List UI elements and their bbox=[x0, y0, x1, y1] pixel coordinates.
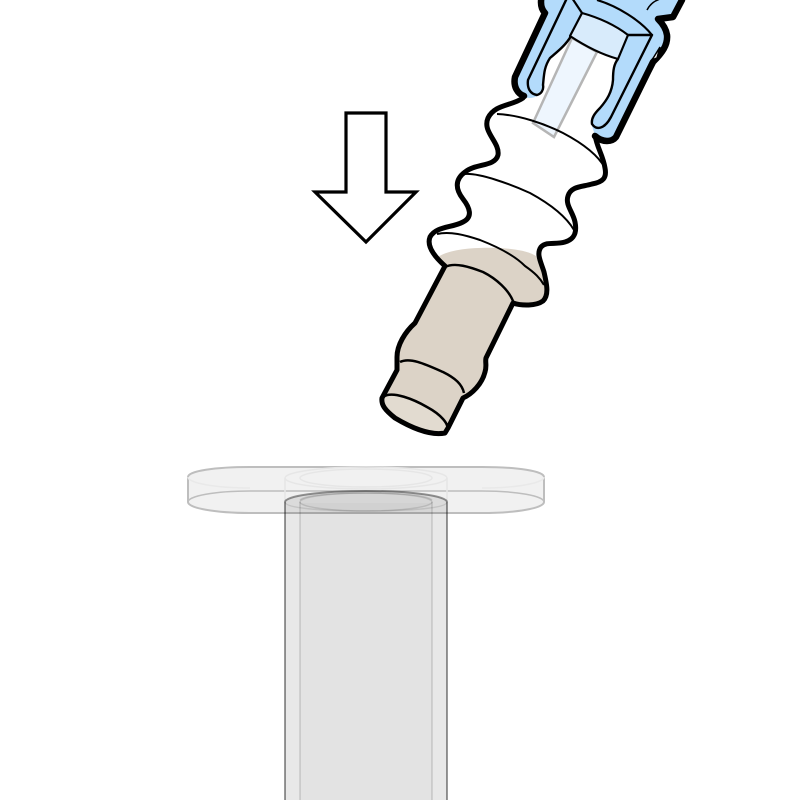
front face bbox=[570, 13, 628, 59]
tube bbox=[285, 491, 447, 800]
flange plate bbox=[188, 467, 544, 513]
bellows body bbox=[429, 98, 605, 305]
blue clip connector bbox=[515, 0, 690, 141]
side notch bbox=[652, 47, 660, 60]
connector assembly bbox=[382, 0, 690, 434]
arrow: downward direction bbox=[315, 113, 416, 242]
bellows and plug outline bbox=[382, 98, 605, 434]
window strip bbox=[533, 38, 597, 137]
outer outline bbox=[515, 0, 545, 96]
tan plug fill bbox=[382, 248, 546, 434]
inner edges bbox=[528, 0, 571, 95]
base socket: translucent flange and tube bbox=[188, 467, 544, 800]
